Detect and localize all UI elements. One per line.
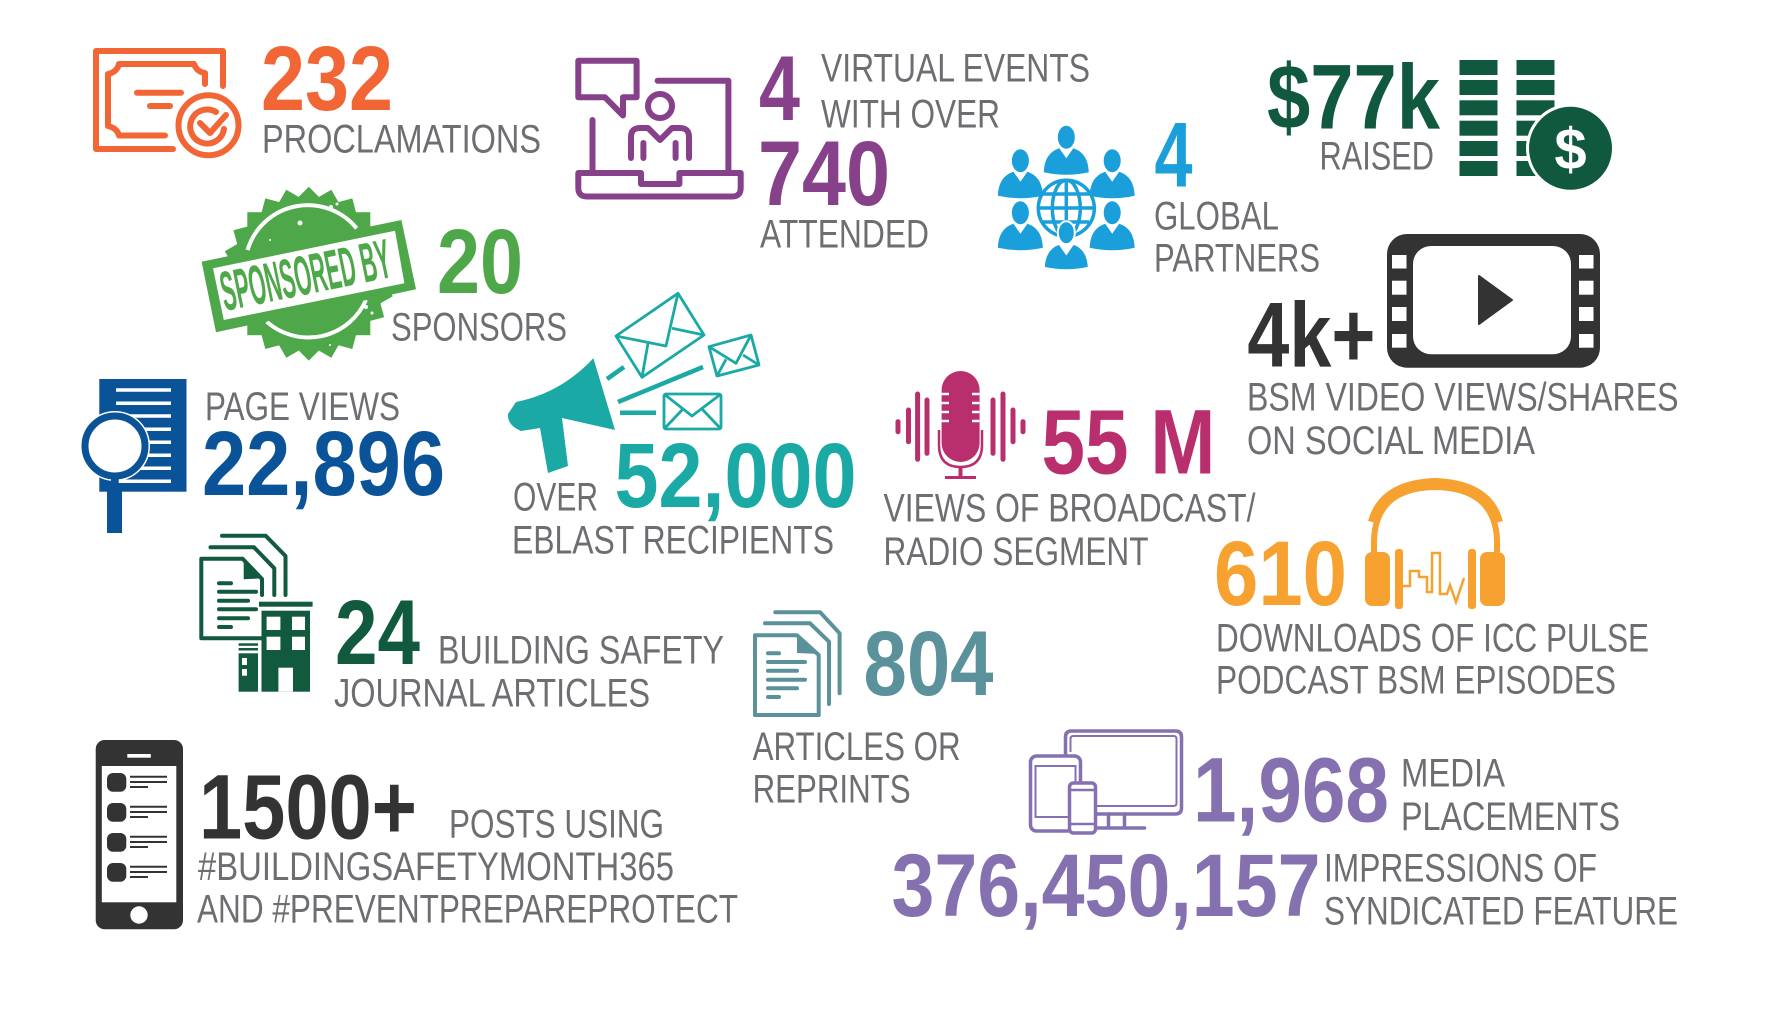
label: views of broadcast radio segment: VIEWS OF BROADCAST/ <box>884 487 1256 531</box>
label: sponsors: SPONSORS <box>391 306 567 350</box>
label: posts using hashtags: POSTS USING <box>449 803 664 847</box>
stat: broadcast radio <box>884 371 1256 574</box>
stat: articles or reprints <box>753 612 994 812</box>
number: 24: 24 <box>335 582 420 684</box>
number: 4 partners: 4 <box>1154 105 1192 207</box>
icon: sponsored by stamp <box>202 187 416 361</box>
number: 740: 740 <box>758 123 890 225</box>
stat: podcast downloads <box>1214 482 1649 702</box>
icon: megaphone with envelopes <box>508 293 759 473</box>
label: video views: BSM VIDEO VIEWS/SHARES <box>1247 376 1678 420</box>
stat: sponsors <box>202 187 567 361</box>
icon: microphone with sound wave <box>898 371 1023 479</box>
label: global partners: PARTNERS <box>1154 237 1320 281</box>
label: posts using hashtags <box>197 803 738 932</box>
label: media placements: PLACEMENTS <box>1401 795 1620 839</box>
number: 52,000: 52,000 <box>614 425 856 527</box>
label: global partners: GLOBAL <box>1154 194 1279 238</box>
label: impressions of syndicated feature: SYNDICATED FEATURE <box>1324 889 1678 933</box>
stat: sponsors: SPONSORED BY <box>215 227 396 323</box>
number: 376,450,157: 376,450,157 <box>892 835 1320 935</box>
number: 22,896: 22,896 <box>202 413 445 515</box>
icon: coin stacks with dollar <box>1460 60 1614 191</box>
number: 610: 610 <box>1214 523 1347 625</box>
number: 55 M: 55 M <box>1042 391 1216 493</box>
label: views of broadcast radio segment: RADIO SEGMENT <box>884 530 1148 574</box>
label: global partners <box>1154 194 1320 281</box>
label: virtual events with over: WITH OVER <box>821 93 1000 137</box>
label: building safety journal articles: BUILDING SAFETY <box>438 628 724 672</box>
icon: film strip play <box>1387 234 1600 368</box>
number: 232: 232 <box>261 28 393 130</box>
label: virtual events with over <box>821 47 1090 137</box>
label: posts using hashtags: #BUILDINGSAFETYMONTH365 <box>198 845 674 889</box>
stat: eblast recipients <box>508 293 856 562</box>
label: articles or reprints <box>753 725 961 812</box>
label: articles or reprints: ARTICLES OR <box>753 725 961 769</box>
label: eblast recipients: EBLAST RECIPIENTS <box>512 518 834 562</box>
label: downloads <box>1216 617 1649 702</box>
number: 20: 20 <box>437 211 523 313</box>
label: impressions of syndicated feature: IMPRESSIONS OF <box>1324 847 1597 891</box>
label: building safety journal articles: JOURNAL ARTICLES <box>334 672 650 716</box>
stat: page views <box>84 379 445 533</box>
stat: raised <box>1267 47 1614 191</box>
label: views of broadcast radio segment <box>884 487 1256 574</box>
stat: journal articles <box>201 536 724 716</box>
label: media placements: MEDIA <box>1401 752 1505 796</box>
icon: monitor, tablet and phone <box>1030 731 1182 833</box>
stat: video views <box>1247 234 1678 463</box>
label: building safety journal articles <box>334 628 724 716</box>
number: 1,968: 1,968 <box>1193 740 1389 842</box>
number: 4 events: 4 <box>759 38 800 140</box>
label: over: OVER <box>513 476 598 520</box>
label: video views <box>1247 376 1678 463</box>
icon: documents and building <box>201 536 313 692</box>
icon: certificate with check <box>96 51 238 155</box>
icon: laptop presenter with speech bubble <box>578 61 741 197</box>
stat: media placements <box>892 731 1678 935</box>
number: $77k: $77k <box>1267 47 1441 149</box>
stat: global partners <box>998 105 1320 281</box>
icon: coin stacks with dollar: $ <box>1554 117 1587 182</box>
label: raised: RAISED <box>1320 134 1434 178</box>
icon: smartphone <box>96 740 183 929</box>
icon: stacked documents <box>755 612 840 715</box>
label: page views: PAGE VIEWS <box>205 385 400 429</box>
icon: headphones with equalizer line <box>1365 482 1505 609</box>
label: video views: ON SOCIAL MEDIA <box>1247 419 1535 463</box>
label: proclamations: PROCLAMATIONS <box>262 118 541 162</box>
label: attended: ATTENDED <box>760 213 929 257</box>
icon: people around globe <box>998 126 1135 270</box>
icon: document with magnifier <box>84 379 186 533</box>
label: downloads: PODCAST BSM EPISODES <box>1216 658 1616 702</box>
stat: proclamations <box>96 28 541 162</box>
label: articles or reprints: REPRINTS <box>753 768 911 812</box>
stat: virtual events <box>578 38 1090 257</box>
number: 4k+: 4k+ <box>1247 285 1375 387</box>
number: 1500+: 1500+ <box>199 756 417 858</box>
label: virtual events with over: VIRTUAL EVENTS <box>821 47 1090 91</box>
label: downloads: DOWNLOADS OF ICC PULSE <box>1216 617 1649 661</box>
number: 804: 804 <box>864 613 994 715</box>
label: media placements <box>1401 752 1620 839</box>
label: impressions of syndicated feature <box>1324 847 1678 933</box>
stat: social posts <box>96 740 738 932</box>
label: posts using hashtags: AND #PREVENTPREPAREPROTECT <box>197 888 738 932</box>
